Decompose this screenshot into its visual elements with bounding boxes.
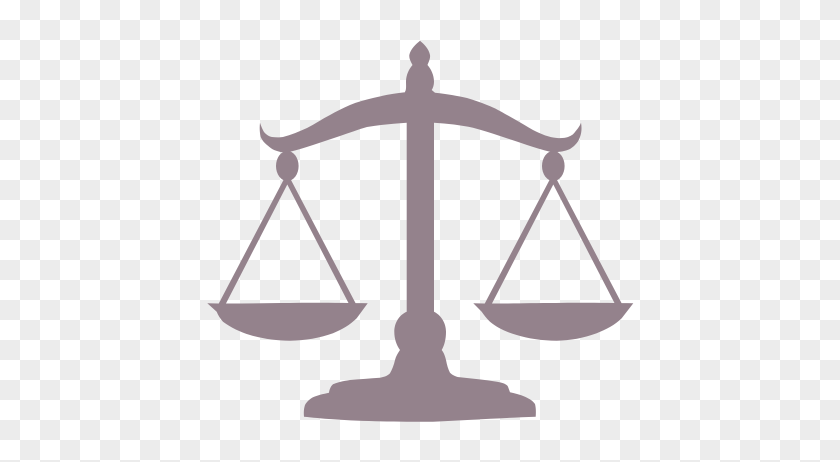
icon: balance scale [207,41,633,422]
base and knob [304,312,536,422]
right pan cords [484,175,622,304]
left pan ball [276,151,299,181]
left pan cords [218,175,356,304]
left pan dish [207,303,368,341]
right pan assembly [473,151,633,341]
right pan dish [473,303,633,341]
right pan ball [542,151,565,181]
beam, finial and central post [260,41,582,325]
left pan assembly [207,151,368,341]
